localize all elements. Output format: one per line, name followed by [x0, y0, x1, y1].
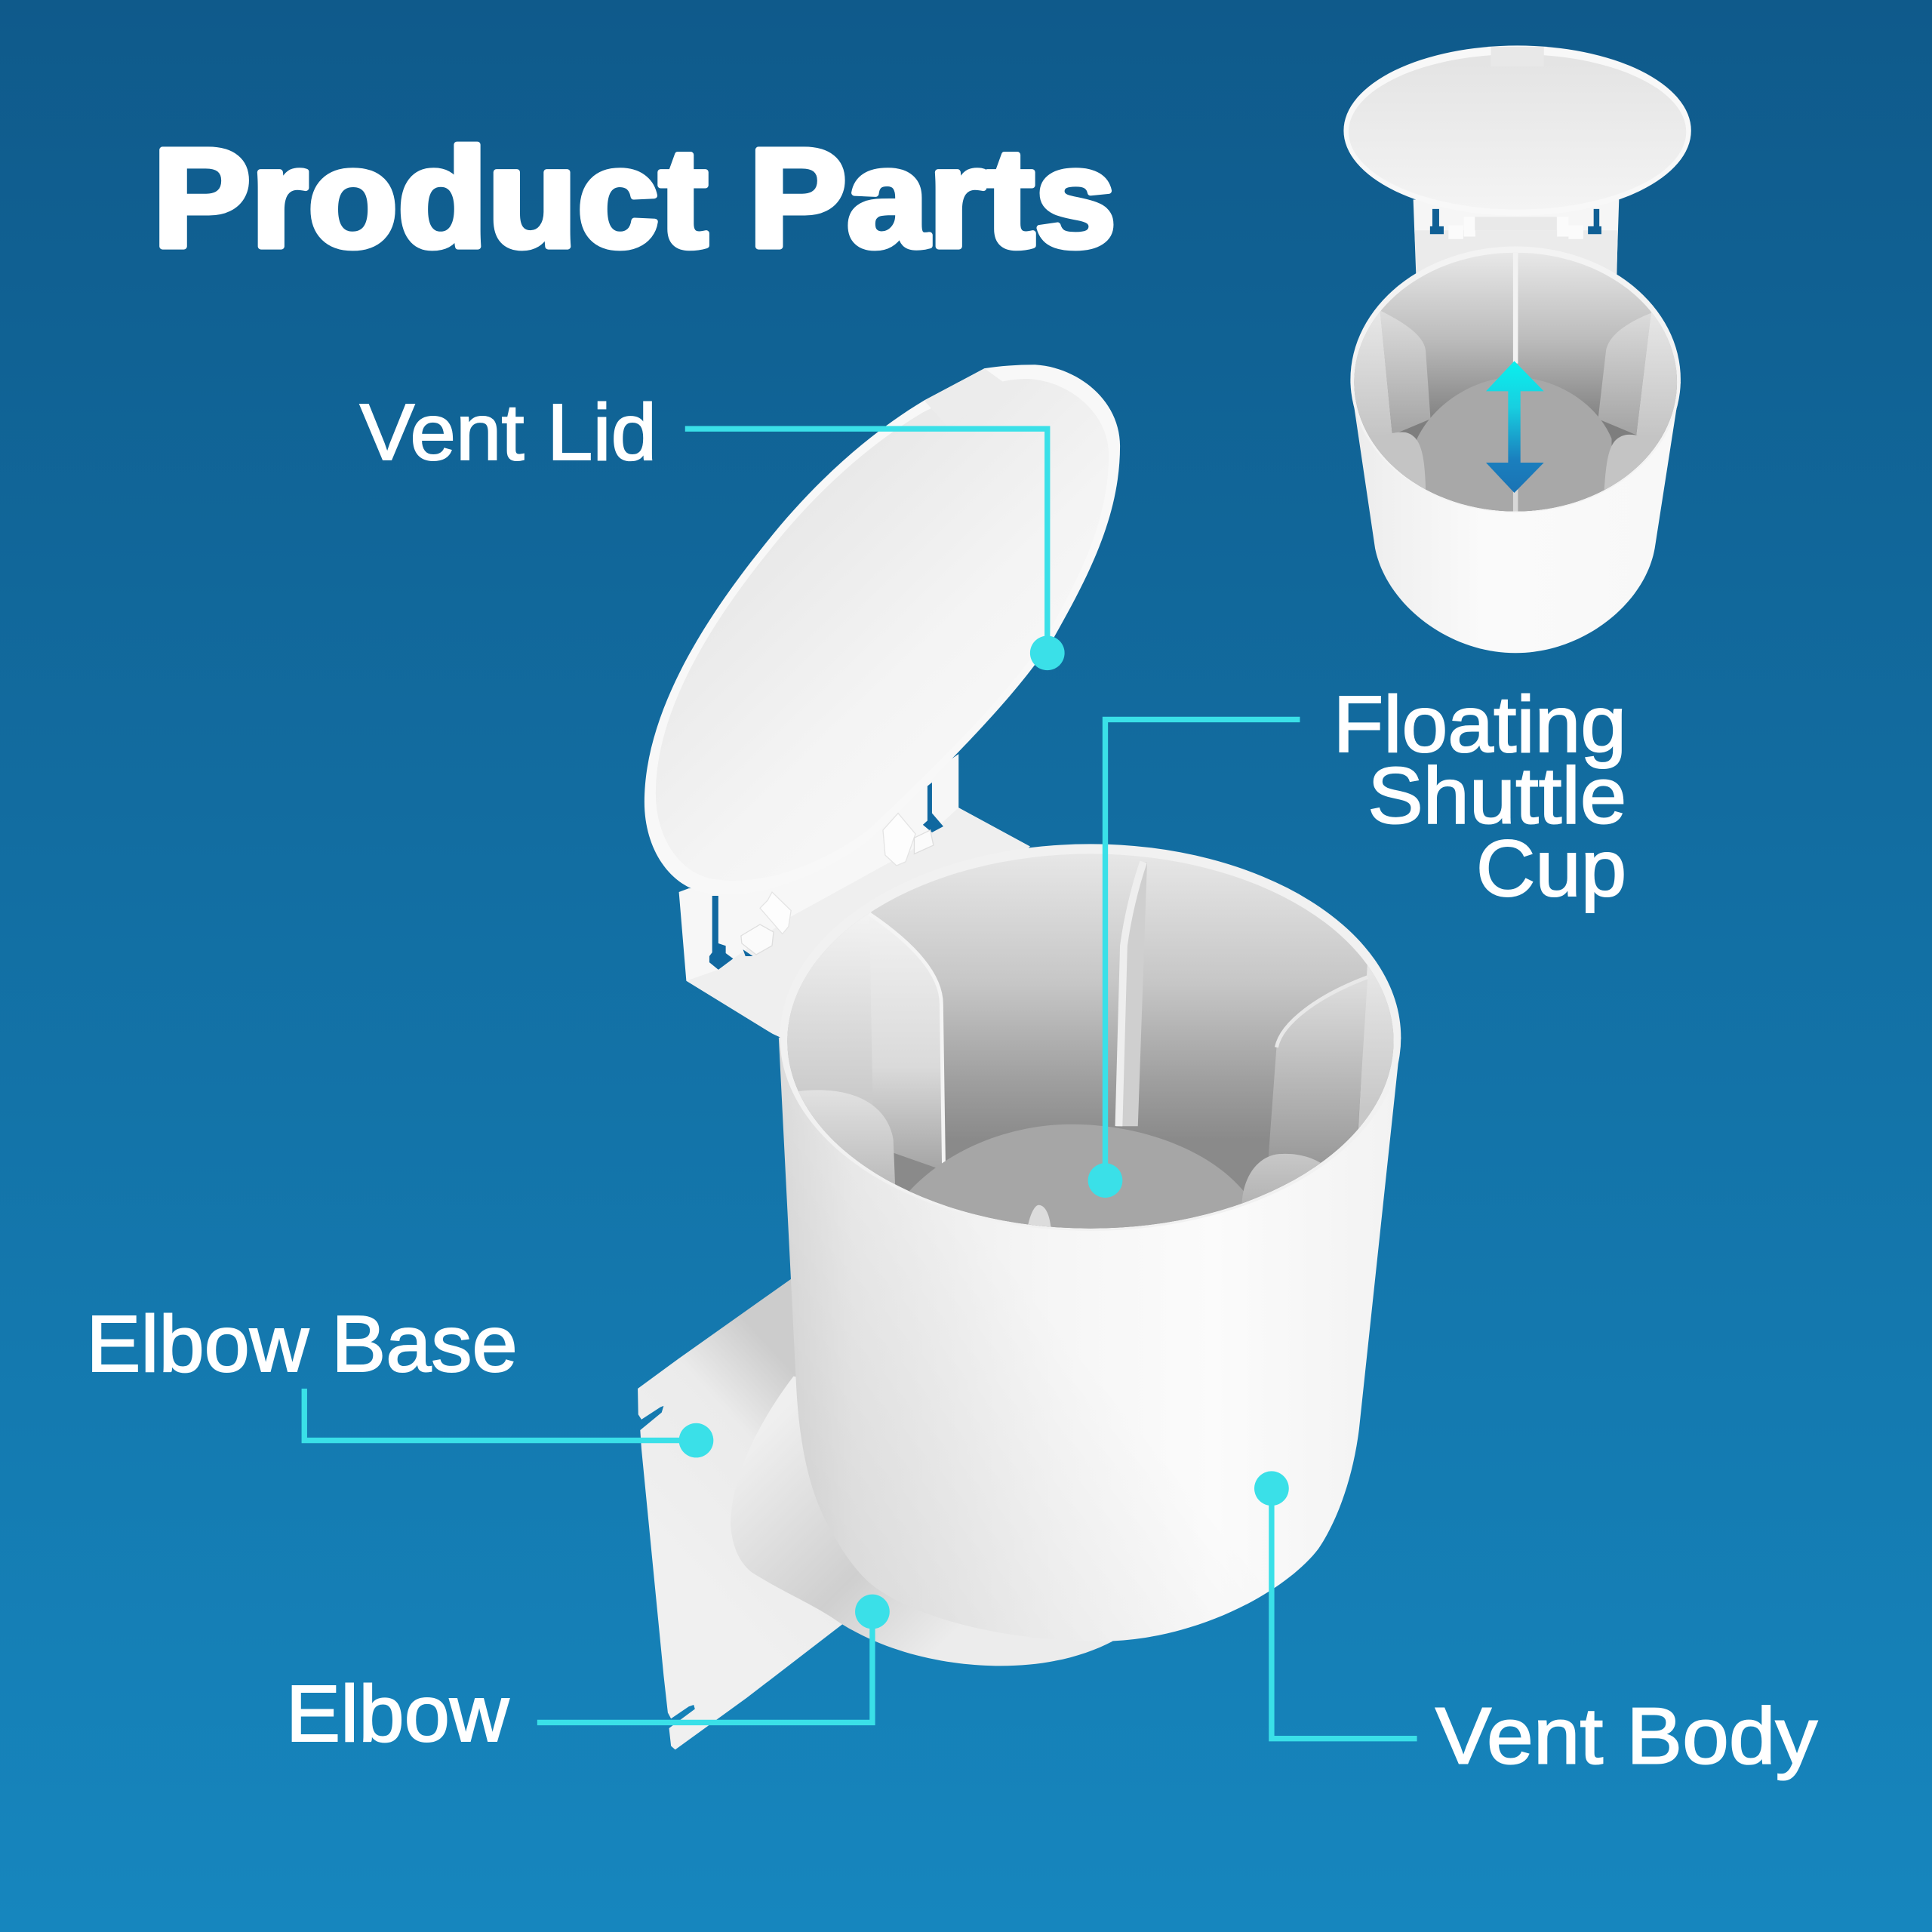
callout: floating shuttle cup: Cup	[1476, 824, 1626, 913]
small view: floating cup	[1343, 45, 1691, 653]
right baffle	[1268, 977, 1367, 1171]
left hinge block	[760, 892, 791, 934]
small cup interior	[1350, 247, 1681, 518]
callout: vent lid	[360, 388, 1065, 670]
small hinge plate	[1414, 199, 1619, 286]
body interior	[787, 854, 1393, 1229]
front right round baffle	[1242, 1153, 1321, 1203]
callout: floating shuttle cup: Shuttle	[1367, 752, 1626, 841]
title: Product Parts	[152, 121, 1116, 277]
callout: floating shuttle cup: Floating	[1334, 680, 1626, 769]
callout: elbow base	[86, 1300, 713, 1457]
left wall segment	[788, 912, 872, 1105]
vent lid	[645, 365, 1120, 894]
callout: vent body: Vent Body	[1435, 1691, 1817, 1780]
double arrow	[1486, 361, 1544, 493]
callout: vent lid: Vent Lid	[360, 388, 657, 477]
floating shuttle dome	[909, 1124, 1246, 1229]
left baffle	[869, 914, 944, 1171]
callout: elbow: Elbow	[286, 1669, 509, 1758]
right hinge block	[883, 814, 915, 866]
vent body	[779, 1038, 1401, 1641]
centre rib	[1116, 862, 1147, 1126]
hinge plate	[679, 754, 1030, 1041]
elbow base plate	[638, 1279, 888, 1749]
callout: elbow	[286, 1595, 890, 1758]
small rim	[1350, 247, 1681, 512]
small lid	[1343, 45, 1691, 216]
callout: elbow base: Elbow Base	[86, 1300, 518, 1389]
elbow	[731, 1377, 1112, 1666]
front left round baffle	[798, 1090, 895, 1184]
small dome	[1417, 377, 1612, 518]
small rib	[1513, 253, 1518, 364]
body rim	[780, 844, 1401, 1231]
main vent product illustration	[638, 365, 1404, 1749]
small cup body	[1350, 382, 1681, 653]
callout: floating shuttle cup	[1088, 680, 1626, 1198]
small hinge details	[1430, 209, 1444, 234]
callout: vent body	[1254, 1471, 1817, 1780]
right wall segment	[1358, 965, 1393, 1129]
small hinge shade	[1414, 230, 1618, 286]
peg	[1028, 1204, 1051, 1227]
left clip	[741, 924, 774, 955]
right clip	[914, 830, 934, 854]
